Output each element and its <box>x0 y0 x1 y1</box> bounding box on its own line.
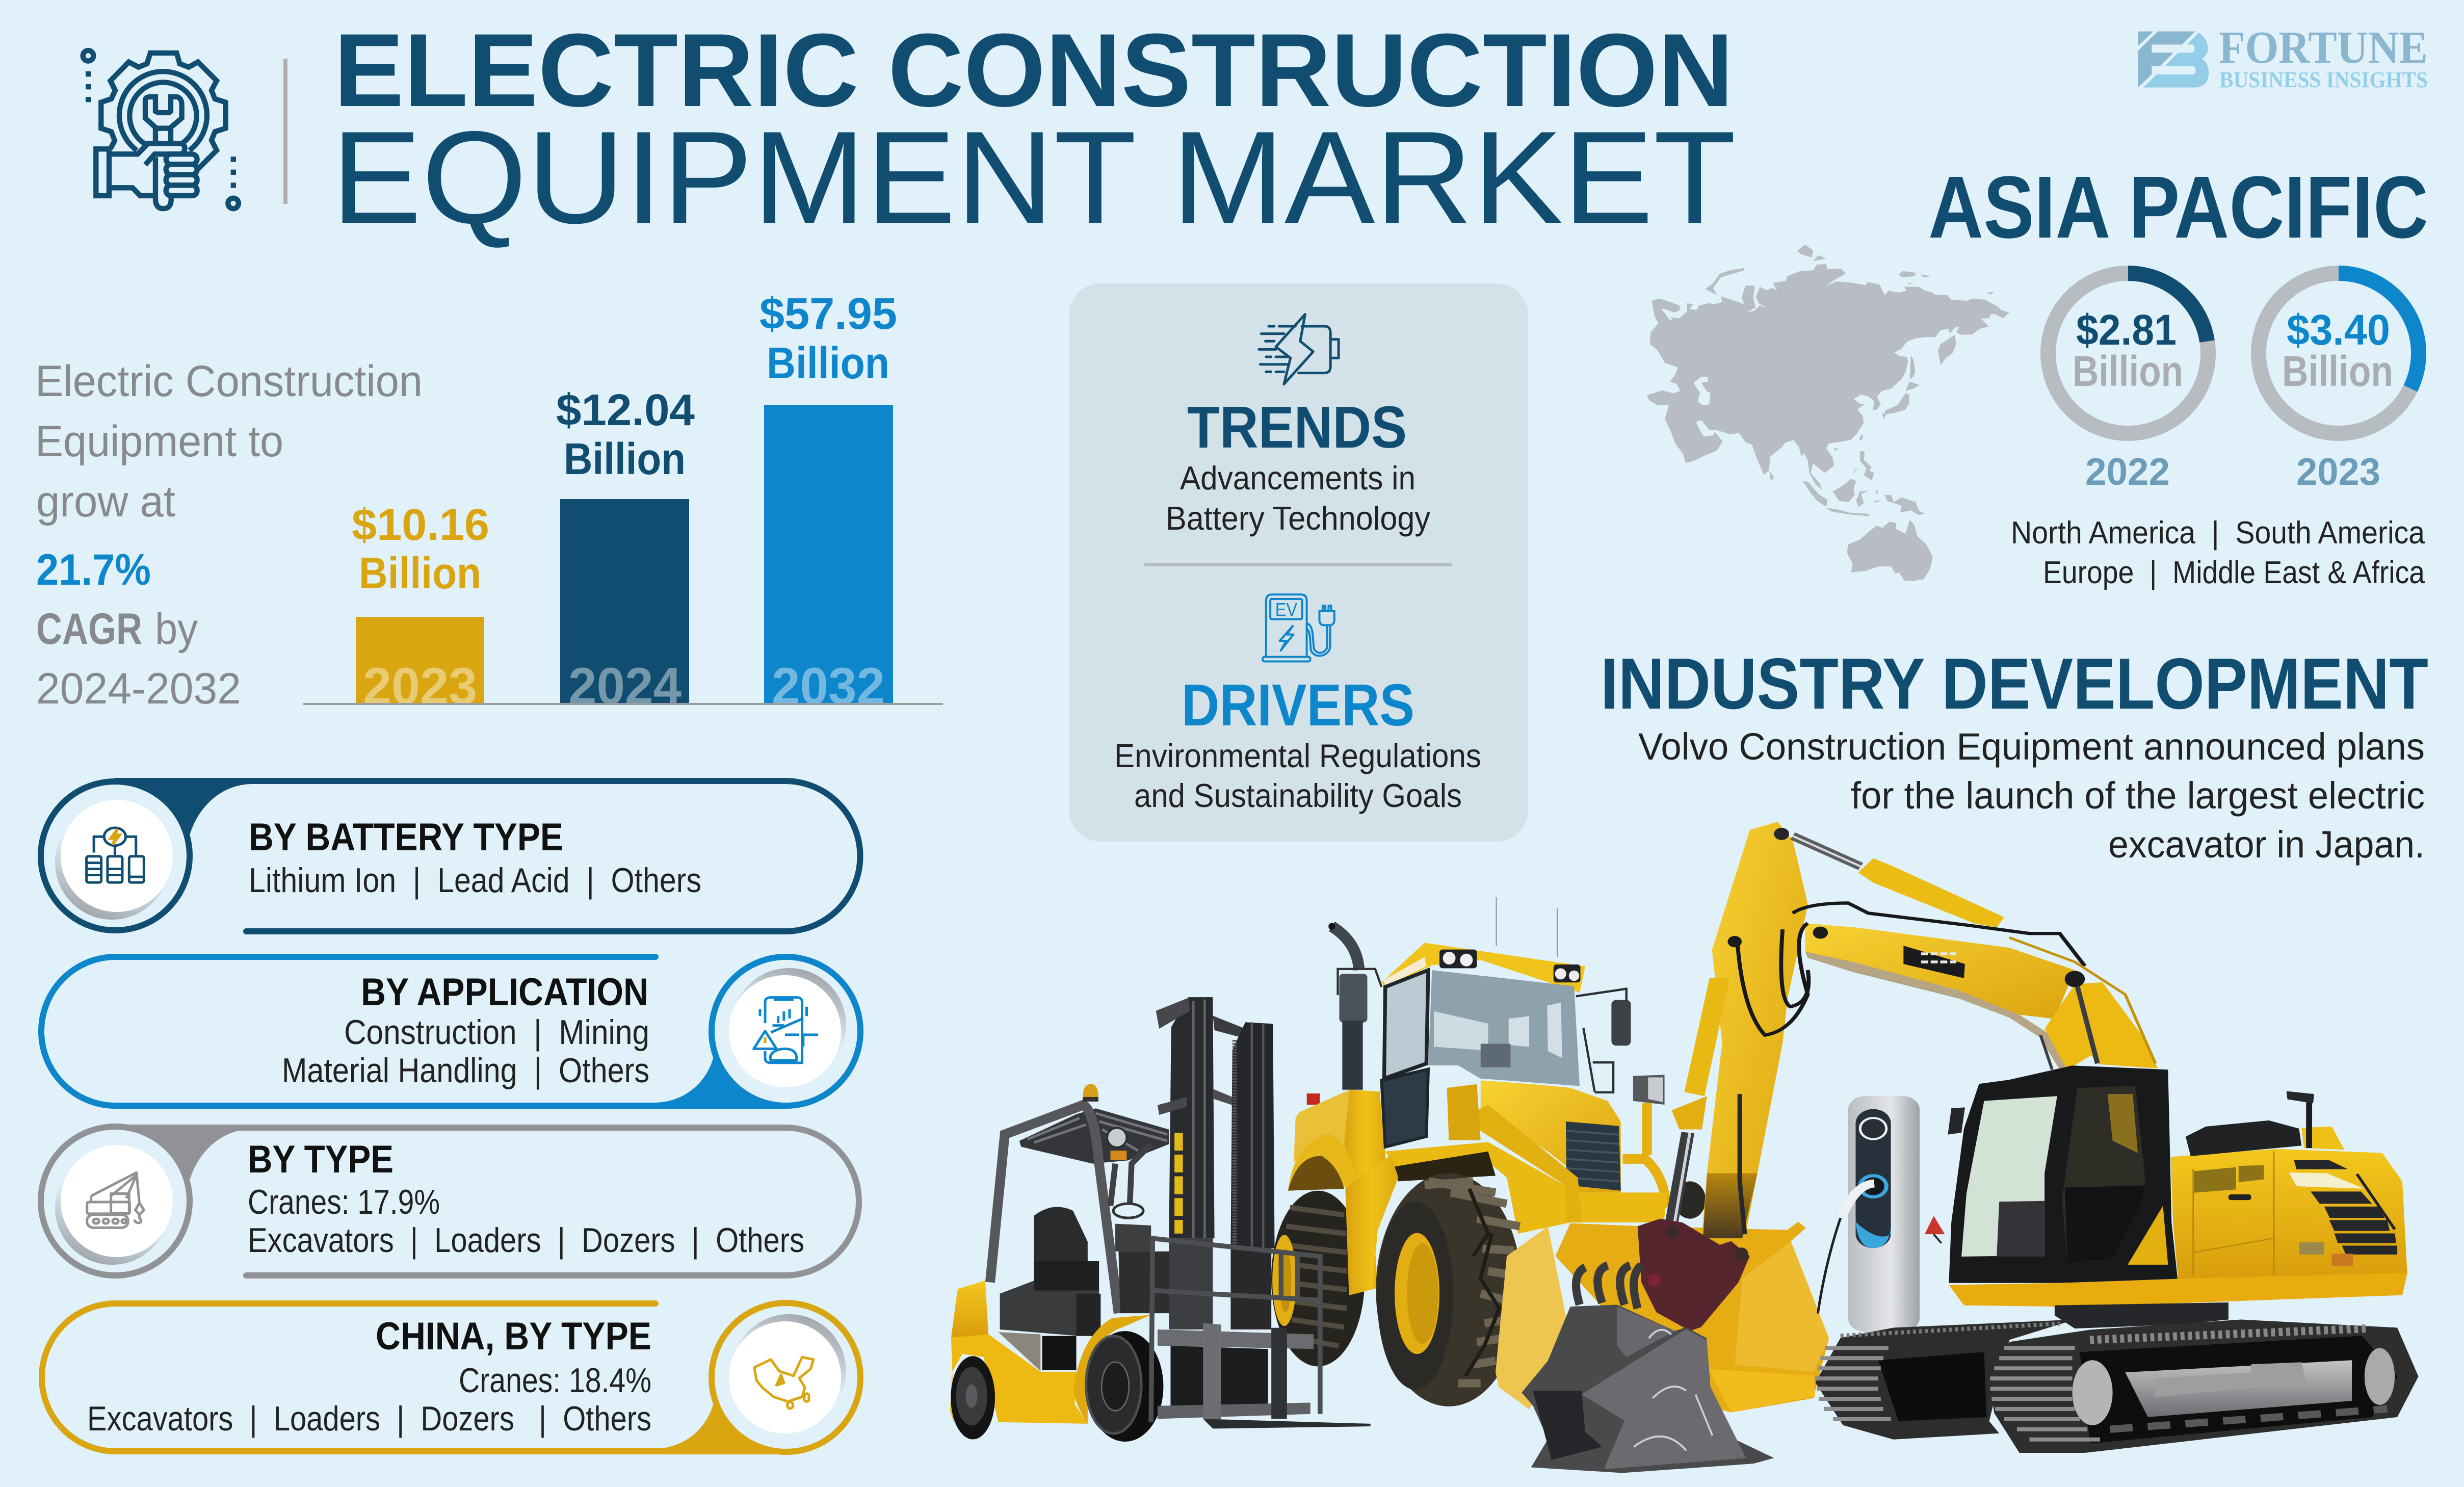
bar 2024 <box>556 385 695 715</box>
text block: CAGR statement: 21.7% <box>36 545 151 594</box>
bar 2024: $12.04 <box>556 385 695 435</box>
icon: batteries <box>87 828 144 882</box>
heading: trends: TRENDS <box>1187 394 1407 460</box>
bar 2032: 2032 <box>772 657 885 715</box>
chart: ring 2022: Billion <box>2073 347 2183 395</box>
text block: CAGR statement: CAGR <box>36 605 142 654</box>
icon: gear with wrench and hand <box>83 50 239 208</box>
header divider <box>283 59 287 204</box>
heading: by battery type: BY BATTERY TYPE <box>249 816 563 859</box>
heading: drivers: DRIVERS <box>1182 672 1414 738</box>
heading: by application: BY APPLICATION <box>361 971 648 1014</box>
vehicle: excavator bucket attachment <box>1522 1219 1774 1473</box>
vehicle: wheel loader <box>1271 897 1829 1413</box>
panel: China by type <box>42 1303 860 1452</box>
text: type shares: Excavators | Loaders | Dozers | Others <box>248 1221 804 1260</box>
icon: phone and EV <box>754 998 818 1063</box>
vehicle: excavator <box>1672 822 2419 1453</box>
text: battery types: Lithium Ion | Lead Acid | Others <box>249 861 701 900</box>
logo: Fortune Business Insights: FORTUNE <box>2219 22 2428 73</box>
chart: ring 2023: 2023 <box>2296 450 2380 493</box>
bar 2023: $10.16 <box>352 500 489 550</box>
text: industry development detail: for the launch of the largest electric <box>1851 774 2425 817</box>
chart: ring 2022 <box>2048 273 2208 493</box>
bar 2032 <box>759 289 897 715</box>
chart: ring 2022: $2.81 <box>2076 306 2177 354</box>
panel: by type <box>41 1127 859 1275</box>
text: type shares <box>248 1183 804 1260</box>
text: type shares: Cranes: 17.9% <box>248 1183 440 1221</box>
bar 2024: Billion <box>564 434 686 484</box>
bar 2032: Billion <box>767 338 889 388</box>
text: other regions: North America | South America <box>2011 515 2425 551</box>
bar 2032: $57.95 <box>759 289 897 338</box>
panel: by application <box>41 957 860 1106</box>
text block: CAGR statement: by <box>155 605 198 654</box>
text: applications: Material Handling | Others <box>282 1051 649 1090</box>
text block: CAGR statement: Electric Construction <box>35 357 423 406</box>
chart: ring 2023: Billion <box>2282 347 2393 395</box>
text: China type shares: Cranes: 18.4% <box>459 1361 651 1400</box>
text: trends detail: Battery Technology <box>1166 500 1430 537</box>
text: other regions <box>2011 515 2425 590</box>
bar chart: market size <box>303 289 943 715</box>
title: ELECTRIC CONSTRUCTION <box>334 12 1734 128</box>
text block: CAGR statement <box>35 357 423 713</box>
chart: ring 2023 <box>2259 273 2419 493</box>
text block: CAGR statement: 2024-2032 <box>36 664 241 713</box>
panel: by battery type <box>41 781 860 931</box>
heading: by type: BY TYPE <box>248 1138 394 1181</box>
title: EQUIPMENT MARKET <box>331 103 1736 251</box>
illustration: construction vehicles <box>950 822 2419 1473</box>
icon: EV charger: EV <box>1275 600 1297 620</box>
icon: crane <box>87 1172 144 1228</box>
text: trends detail: Advancements in <box>1180 459 1416 497</box>
text: industry development detail: Volvo Construction Equipment announced plans <box>1638 725 2425 768</box>
map: Asia Pacific <box>1647 245 2009 581</box>
logo: Fortune Business Insights: BUSINESS INSIGHTS <box>2219 67 2428 92</box>
chart: ring 2022: 2022 <box>2085 450 2170 493</box>
vehicle: forklift <box>950 997 1371 1442</box>
bar 2023: Billion <box>359 549 481 598</box>
panel: trends and drivers <box>1069 283 1528 842</box>
text: applications: Construction | Mining <box>344 1013 649 1052</box>
text: drivers detail: Environmental Regulations <box>1114 737 1481 774</box>
text: other regions: Europe | Middle East & Africa <box>2043 555 2425 590</box>
chart: ring 2023: $3.40 <box>2287 306 2390 354</box>
text: trends detail <box>1166 459 1430 537</box>
text: China type shares: Excavators | Loaders | Dozers | Others <box>87 1399 651 1438</box>
text: China type shares <box>87 1361 651 1438</box>
text: industry development detail <box>1638 725 2425 866</box>
text block: CAGR statement: grow at <box>36 477 175 526</box>
text: drivers detail: and Sustainability Goals <box>1134 777 1462 814</box>
text: applications <box>282 1013 649 1090</box>
text: industry development detail: excavator in Japan. <box>2108 823 2425 866</box>
heading: China by type: CHINA, BY TYPE <box>376 1315 651 1358</box>
bar 2023 <box>352 500 489 715</box>
icon: EV charger <box>1263 594 1334 661</box>
icon: fast charging battery <box>1259 314 1339 384</box>
icon: China map <box>754 1357 814 1408</box>
text: drivers detail <box>1114 737 1481 814</box>
bar 2023: 2023 <box>363 657 477 715</box>
logo: Fortune Business Insights <box>2138 22 2428 92</box>
bar 2024: 2024 <box>568 657 681 715</box>
text block: CAGR statement: Equipment to <box>35 417 283 466</box>
title <box>331 12 1736 251</box>
